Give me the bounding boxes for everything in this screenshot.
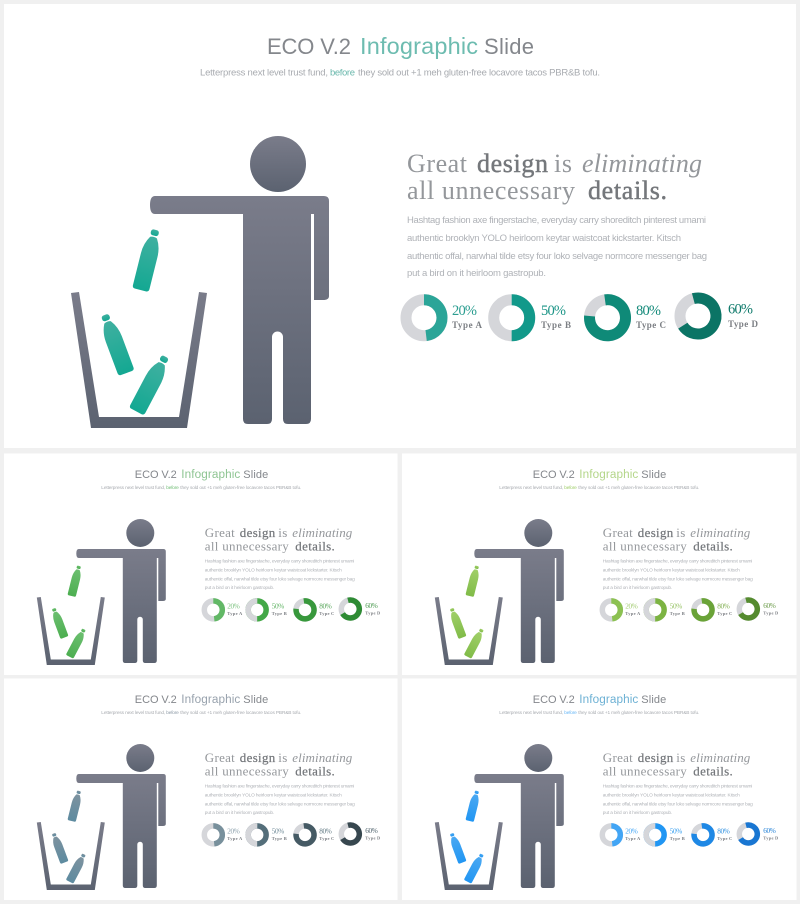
title: ECO V.2: [135, 694, 177, 706]
donut: Type C 80%: [693, 600, 732, 620]
donut: Type C 80%: 80%: [319, 828, 332, 836]
heading: Great: [205, 525, 235, 540]
icon: bottle in bin left: [97, 312, 134, 376]
subtitle: they sold out +1 meh gluten-free locavore tacos PBR&B tofu.: [358, 68, 600, 78]
icon: bottle in bin right: [129, 353, 173, 415]
body text: Hashtag fashion axe fingerstache, everyday carry shoreditch pinterest umami: [205, 558, 354, 564]
donut: Type B 50%: 50%: [272, 602, 284, 610]
panel: green slide: [4, 454, 398, 675]
panel background: [402, 454, 796, 675]
body text: authentic offal, narwhal tilde etsy four loko selvage normcore messenger bag: [407, 251, 707, 262]
donut: Type A 20%: Type A: [227, 611, 243, 616]
slide content: [435, 468, 779, 665]
icon: person: [150, 136, 329, 424]
heading: all unnecessary: [205, 764, 289, 778]
icon: trash bin: [435, 597, 503, 665]
heading: details.: [295, 764, 335, 778]
donut: Type C 80%: Type C: [636, 320, 666, 330]
body text: put a bird on it heirloom gastropub.: [205, 810, 274, 816]
donut: Type D 60%: [339, 823, 381, 845]
donut: Type C 80%: [295, 825, 334, 845]
donut: Type A 20%: [602, 601, 641, 619]
heading: eliminating: [292, 750, 353, 765]
title: Slide: [484, 34, 534, 59]
subtitle: they sold out +1 meh gluten-free locavore tacos PBR&B tofu.: [578, 710, 699, 716]
body text: authentic offal, narwhal tilde etsy four loko selvage normcore messenger bag: [603, 576, 753, 582]
donut: Type A 20%: 20%: [227, 602, 240, 610]
icon: bottle in bin left: [50, 607, 69, 639]
body text: authentic offal, narwhal tilde etsy four loko selvage normcore messenger bag: [205, 576, 355, 582]
heading: details.: [693, 764, 733, 778]
panel: lime slide: [402, 454, 796, 675]
donut: Type B 50%: 50%: [670, 828, 682, 836]
donut: Type D 60%: [339, 598, 381, 620]
subtitle: they sold out +1 meh gluten-free locavore tacos PBR&B tofu.: [180, 710, 301, 716]
donut: Type D 60%: Type D: [365, 836, 381, 840]
donut: Type B 50%: Type B: [670, 611, 685, 616]
donut: Type D 60%: 60%: [728, 302, 753, 318]
heading: eliminating: [582, 149, 702, 178]
icon: bottle in bin right: [66, 852, 88, 884]
body text: put a bird on it heirloom gastropub.: [205, 585, 274, 591]
heading: Great: [603, 525, 633, 540]
subtitle: they sold out +1 meh gluten-free locavore tacos PBR&B tofu.: [578, 485, 699, 491]
donut: Type B 50%: 50%: [541, 303, 566, 319]
heading: details.: [693, 538, 733, 554]
donut: Type D 60%: Type D: [763, 836, 779, 840]
donut: Type C 80%: 80%: [319, 602, 332, 610]
heading: details.: [588, 176, 667, 205]
subtitle: before: [330, 68, 355, 78]
heading: is: [554, 149, 572, 178]
title: ECO V.2: [533, 694, 575, 706]
donut: Type B 50%: Type B: [272, 836, 287, 841]
panel: slate slide: [4, 678, 398, 900]
heading: Great: [603, 750, 633, 765]
body text: put a bird on it heirloom gastropub.: [407, 268, 546, 279]
icon: falling bottle: [132, 228, 164, 292]
heading: is: [676, 750, 685, 765]
donut: Type B 50%: [646, 826, 685, 844]
donut: Type C 80%: 80%: [636, 303, 661, 319]
donut: Type C 80%: 80%: [717, 828, 730, 836]
body text: put a bird on it heirloom gastropub.: [603, 585, 672, 591]
panel: blue slide: [402, 678, 796, 900]
donut: Type C 80%: Type C: [717, 611, 732, 616]
title: Slide: [243, 469, 268, 481]
heading: is: [676, 525, 685, 540]
donut: Type C 80%: [587, 297, 666, 338]
icon: falling bottle: [465, 565, 481, 597]
icon: bottle in bin left: [50, 832, 69, 864]
icon: bottle in bin right: [464, 852, 486, 884]
heading: all unnecessary: [205, 538, 289, 554]
subtitle: they sold out +1 meh gluten-free locavore tacos PBR&B tofu.: [180, 485, 301, 491]
donut: Type B 50%: Type B: [272, 611, 287, 616]
donut: Type A 20%: Type A: [452, 320, 482, 330]
donut: Type D 60%: 60%: [763, 827, 776, 835]
icon: bottle in bin right: [66, 627, 88, 659]
icon: bottle in bin left: [448, 832, 467, 864]
heading: is: [278, 750, 287, 765]
subtitle: Letterpress next level trust fund,: [499, 710, 563, 716]
donut: Type A 20%: [406, 300, 482, 336]
donut: Type D 60%: 60%: [365, 602, 378, 610]
slide content: [71, 33, 758, 428]
heading: design: [240, 750, 276, 765]
donut: Type A 20%: Type A: [625, 611, 641, 616]
donut: Type A 20%: [204, 601, 243, 619]
heading: Great: [407, 149, 468, 178]
body text: authentic offal, narwhal tilde etsy four loko selvage normcore messenger bag: [603, 802, 753, 808]
slide content: [37, 468, 381, 665]
heading: eliminating: [690, 525, 751, 540]
donut: Type D 60%: Type D: [763, 610, 779, 616]
donut: Type D 60%: 60%: [763, 602, 776, 610]
title: ECO V.2: [533, 469, 575, 481]
subtitle: Letterpress next level trust fund,: [101, 710, 165, 716]
donut: Type A 20%: [204, 826, 243, 844]
donut: Type B 50%: 50%: [272, 828, 284, 836]
subtitle: before: [564, 710, 577, 716]
icon: falling bottle: [67, 565, 83, 597]
icon: trash bin: [37, 597, 105, 665]
heading: eliminating: [292, 525, 353, 540]
donut: Type A 20%: 20%: [452, 303, 477, 319]
donut: Type A 20%: 20%: [227, 828, 240, 836]
body text: authentic brooklyn YOLO heirloom keytar waistcoat kickstarter. Kitsch: [603, 792, 740, 798]
donut: Type A 20%: 20%: [625, 828, 638, 836]
title: Infographic: [360, 33, 478, 59]
icon: falling bottle: [465, 790, 481, 822]
title: Infographic: [579, 693, 638, 706]
icon: person: [76, 519, 166, 663]
title: Slide: [243, 694, 268, 706]
donut: Type C 80%: Type C: [717, 836, 732, 841]
title: Slide: [641, 694, 666, 706]
subtitle: before: [166, 710, 179, 716]
donut: Type C 80%: Type C: [319, 836, 334, 841]
body text: Hashtag fashion axe fingerstache, everyday carry shoreditch pinterest umami: [205, 784, 354, 790]
title: Infographic: [181, 468, 240, 481]
body text: authentic offal, narwhal tilde etsy four loko selvage normcore messenger bag: [205, 802, 355, 808]
heading: details.: [295, 538, 335, 554]
body text: authentic brooklyn YOLO heirloom keytar waistcoat kickstarter. Kitsch: [603, 568, 740, 574]
title: ECO V.2: [267, 34, 351, 59]
heading: Great: [205, 750, 235, 765]
donut: Type D 60%: [737, 823, 779, 845]
icon: bottle in bin left: [448, 607, 467, 639]
donut: Type C 80%: [295, 600, 334, 620]
donut: Type A 20%: Type A: [227, 836, 243, 841]
heading: eliminating: [690, 750, 751, 765]
donut: Type C 80%: 80%: [717, 602, 730, 610]
body text: authentic brooklyn YOLO heirloom keytar waistcoat kickstarter. Kitsch: [407, 233, 681, 244]
donut: Type D 60%: [676, 294, 758, 338]
title: Infographic: [181, 693, 240, 706]
donut: Type B 50%: [494, 300, 571, 336]
icon: person: [474, 519, 564, 663]
donut: Type B 50%: Type B: [541, 320, 571, 330]
heading: design: [477, 149, 548, 178]
donut: Type B 50%: [248, 601, 287, 619]
donut: Type B 50%: Type B: [670, 836, 685, 841]
slide content: [435, 693, 779, 890]
icon: falling bottle: [67, 790, 83, 822]
subtitle: Letterpress next level trust fund,: [200, 68, 328, 78]
title: Infographic: [579, 468, 638, 481]
body text: authentic brooklyn YOLO heirloom keytar waistcoat kickstarter. Kitsch: [205, 568, 342, 574]
icon: trash bin: [435, 822, 503, 890]
donut: Type B 50%: [248, 826, 287, 844]
heading: design: [240, 525, 276, 540]
heading: all unnecessary: [407, 176, 575, 205]
donut: Type A 20%: [602, 826, 641, 844]
slide content: [37, 693, 381, 890]
heading: all unnecessary: [603, 538, 687, 554]
title: Slide: [641, 469, 666, 481]
donut: Type A 20%: Type A: [625, 836, 641, 841]
title: ECO V.2: [135, 469, 177, 481]
icon: trash bin: [37, 822, 105, 890]
donut: Type D 60%: 60%: [365, 827, 378, 835]
body text: Hashtag fashion axe fingerstache, everyday carry shoreditch pinterest umami: [407, 215, 706, 226]
icon: bottle in bin right: [464, 627, 486, 659]
body text: Hashtag fashion axe fingerstache, everyday carry shoreditch pinterest umami: [603, 558, 752, 564]
donut: Type C 80%: [693, 825, 732, 845]
subtitle: before: [166, 485, 179, 491]
icon: person: [76, 744, 166, 888]
body text: Hashtag fashion axe fingerstache, everyday carry shoreditch pinterest umami: [603, 784, 752, 790]
donut: Type B 50%: 50%: [670, 602, 682, 610]
donut: Type C 80%: Type C: [319, 611, 334, 616]
donut: Type A 20%: 20%: [625, 602, 638, 610]
body text: authentic brooklyn YOLO heirloom keytar waistcoat kickstarter. Kitsch: [205, 792, 342, 798]
panel background: [4, 4, 796, 448]
subtitle: Letterpress next level trust fund,: [101, 485, 165, 491]
donut: Type D 60%: [737, 598, 779, 620]
panel background: [402, 678, 796, 900]
subtitle: before: [564, 485, 577, 491]
heading: is: [278, 525, 287, 540]
subtitle: Letterpress next level trust fund,: [499, 485, 563, 491]
panel: main teal slide: [4, 4, 796, 448]
panel background: [4, 454, 398, 675]
panel background: [4, 678, 398, 900]
donut: Type D 60%: Type D: [365, 610, 381, 616]
heading: all unnecessary: [603, 764, 687, 778]
donut: Type D 60%: Type D: [728, 319, 758, 329]
icon: trash bin: [71, 292, 207, 428]
heading: design: [638, 525, 674, 540]
donut: Type B 50%: [646, 601, 685, 619]
icon: person: [474, 744, 564, 888]
heading: design: [638, 750, 674, 765]
body text: put a bird on it heirloom gastropub.: [603, 810, 672, 816]
